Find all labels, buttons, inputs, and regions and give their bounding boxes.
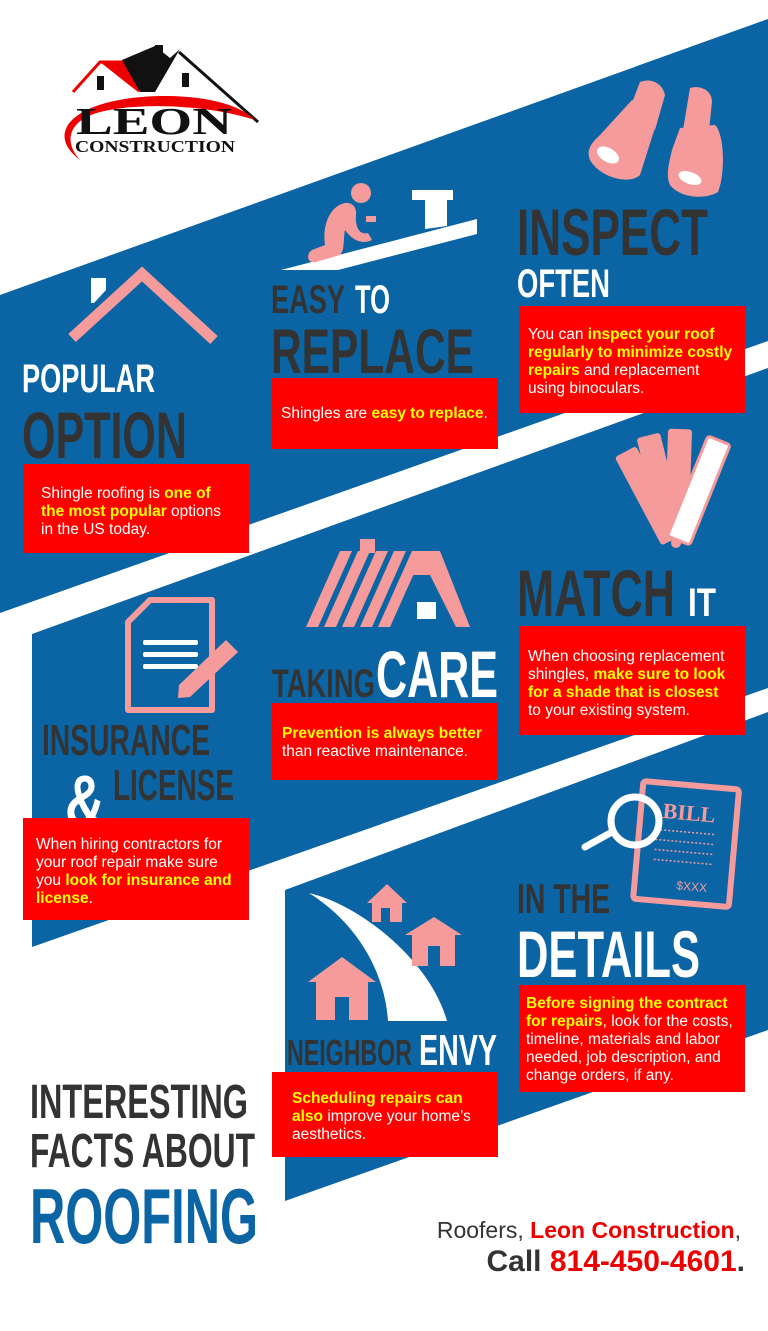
icon: bill with magnifier: BILL xyxy=(662,798,716,827)
footer contact xyxy=(437,1217,745,1278)
text box: inspect often: using binoculars. xyxy=(528,380,644,397)
text box: insurance: When hiring contractors for xyxy=(36,836,222,853)
heading: match it: MATCH xyxy=(517,556,675,630)
heading: taking care xyxy=(272,637,498,711)
text box: neighbor envy xyxy=(272,1072,498,1157)
text box: in the details: change orders, if any. xyxy=(526,1067,674,1084)
heading: taking care: TAKING xyxy=(272,662,375,706)
text box: in the details: needed, job description, and xyxy=(526,1049,721,1066)
text box: insurance: you look for insurance and xyxy=(36,872,232,889)
logo: CONSTRUCTION xyxy=(75,137,236,156)
heading: in the details xyxy=(517,875,700,991)
heading: easy to replace: REPLACE xyxy=(271,317,474,387)
text box: in the details: for repairs, look for the costs, xyxy=(526,1013,733,1030)
text box: in the details xyxy=(519,985,745,1092)
icon: worker on roof xyxy=(281,183,477,270)
heading: popular option: OPTION xyxy=(22,398,187,472)
text box: popular option: in the US today. xyxy=(41,521,150,538)
blue band 2 xyxy=(32,368,768,947)
heading: insurance & license xyxy=(42,716,234,842)
title: FACTS ABOUT xyxy=(30,1125,255,1178)
heading: neighbor envy: NEIGHBOR xyxy=(287,1032,412,1073)
icon: document with pencil xyxy=(128,600,238,710)
title: ROOFING xyxy=(30,1172,258,1260)
logo xyxy=(64,45,258,160)
text box: insurance xyxy=(23,818,249,920)
text box: match it: shingles, make sure to look xyxy=(528,666,726,683)
text box: inspect often: You can inspect your roof xyxy=(528,326,715,343)
text box: inspect often: repairs and replacement xyxy=(528,362,700,379)
text box: in the details: Before signing the contract xyxy=(526,995,728,1012)
text box: match it: When choosing replacement xyxy=(528,648,725,665)
text box: insurance: license. xyxy=(36,890,93,907)
footer contact: Roofers, Leon Construction, xyxy=(437,1217,741,1243)
heading: easy to replace: TO xyxy=(355,278,390,322)
heading: easy to replace: EASY xyxy=(271,278,345,322)
heading: neighbor envy: ENVY xyxy=(419,1026,497,1075)
heading: popular option: POPULAR xyxy=(22,357,155,401)
heading: match it: IT xyxy=(688,581,716,625)
text box: inspect often xyxy=(519,306,745,413)
heading: insurance & license: & xyxy=(65,762,105,842)
text box: taking care xyxy=(272,703,498,780)
text box: taking care: than reactive maintenance. xyxy=(282,743,468,760)
icon: bill with magnifier: $XXX xyxy=(676,878,708,895)
heading: taking care: CARE xyxy=(376,637,498,711)
heading: popular option xyxy=(22,357,187,472)
text box: inspect often: regularly to minimize costly xyxy=(528,344,733,361)
icon: binoculars xyxy=(589,81,723,197)
text box: popular option: the most popular options xyxy=(41,503,221,520)
heading: inspect often xyxy=(517,195,708,306)
text box: easy to replace: Shingles are easy to replace. xyxy=(281,405,488,422)
footer contact: Call 814-450-4601. xyxy=(486,1245,745,1278)
text box: neighbor envy: also improve your home’s xyxy=(292,1108,471,1125)
heading: easy to replace xyxy=(271,278,474,387)
text box: easy to replace xyxy=(272,378,498,449)
title: INTERESTING xyxy=(30,1076,248,1129)
heading: in the details: IN THE xyxy=(517,875,610,922)
text box: insurance: your roof repair make sure xyxy=(36,854,218,871)
heading: insurance & license: INSURANCE xyxy=(42,716,210,765)
icon: road with houses xyxy=(308,884,462,1021)
blue band 1 xyxy=(0,19,768,613)
icon: shingled roof xyxy=(306,539,470,627)
blue band 3 xyxy=(285,712,768,1201)
text box: in the details: timeline, materials and labor xyxy=(526,1031,720,1048)
logo: LEON xyxy=(76,101,232,143)
icon: bill with magnifier xyxy=(585,781,739,907)
text box: match it xyxy=(519,626,745,735)
heading: insurance & license: LICENSE xyxy=(113,761,234,810)
text box: taking care: Prevention is always better xyxy=(282,725,482,742)
heading: inspect often: OFTEN xyxy=(517,262,610,306)
icon: roof chevron xyxy=(72,274,214,340)
text box: match it: for a shade that is closest xyxy=(528,684,718,701)
text box: match it: to your existing system. xyxy=(528,702,690,719)
title xyxy=(30,1076,258,1260)
text box: popular option: Shingle roofing is one of xyxy=(41,485,212,502)
text box: popular option xyxy=(23,464,249,553)
text box: neighbor envy: aesthetics. xyxy=(292,1126,366,1143)
icon: swatch fan xyxy=(615,429,730,548)
text box: neighbor envy: Scheduling repairs can xyxy=(292,1090,463,1107)
